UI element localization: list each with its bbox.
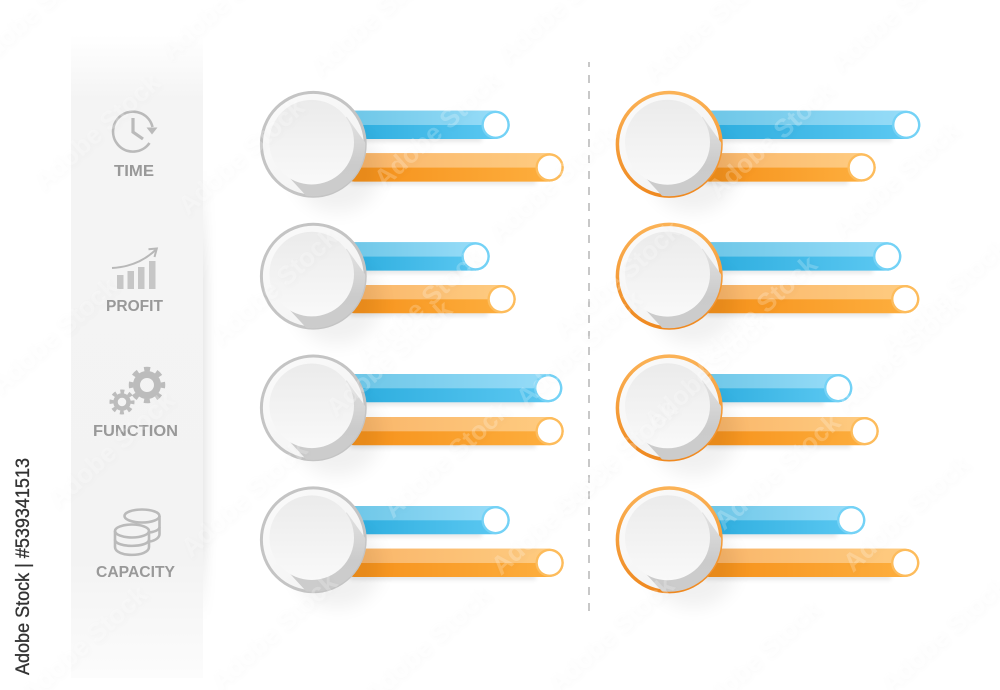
orange bar [340, 153, 564, 184]
blue bar [695, 111, 920, 142]
watermark: Adobe Stock [377, 395, 515, 524]
watermark: Adobe Stock [545, 394, 683, 523]
watermark: Adobe Stock [175, 434, 313, 563]
watermark: Adobe Stock [320, 294, 458, 423]
blue bar [695, 242, 901, 273]
watermark: Adobe Stock [638, 307, 776, 436]
blue bar [340, 506, 510, 537]
blue bar [340, 242, 490, 273]
circle [617, 356, 737, 476]
row 3 left [261, 356, 564, 476]
row 1 left [261, 92, 564, 212]
watermark: Adobe Stock [548, 215, 686, 344]
row 4 left [261, 488, 564, 608]
icon: clock [113, 112, 158, 152]
orange bar [695, 153, 876, 184]
watermark: Adobe Stock [172, 92, 310, 221]
circle [261, 92, 381, 212]
watermark: Adobe Stock [837, 449, 975, 578]
circle [617, 224, 737, 344]
circle [617, 488, 737, 608]
row 1 right [617, 92, 920, 212]
icon: profit chart [112, 248, 157, 289]
watermark: Adobe Stock [42, 385, 180, 514]
orange bar [340, 417, 564, 448]
watermark: Adobe Stock [708, 407, 846, 536]
orange bar [340, 285, 516, 316]
blue bar [340, 111, 510, 142]
stock id side text: Adobe Stock | #539341513 [12, 458, 34, 675]
orange bar [695, 417, 879, 448]
watermark: Adobe Stock [350, 242, 488, 371]
watermark: Adobe Stock [205, 222, 343, 351]
label: TIME: TIME [114, 163, 154, 180]
circle [261, 356, 381, 476]
row 2 right [617, 224, 919, 344]
blue bar [340, 374, 562, 405]
watermark: Adobe Stock [368, 65, 506, 194]
row 2 left [261, 224, 516, 344]
label: PROFIT: PROFIT [106, 298, 164, 315]
watermark: Adobe Stock [685, 249, 823, 378]
blue bar [695, 374, 852, 405]
icon: coins [115, 510, 160, 555]
label: FUNCTION: FUNCTION [93, 423, 178, 440]
watermark: Adobe Stock [28, 67, 166, 196]
watermark: Adobe Stock [510, 284, 648, 413]
watermark: Adobe Stock [830, 289, 968, 418]
row 3 right [617, 356, 879, 476]
watermark: Adobe Stock [827, 115, 965, 244]
label: CAPACITY: CAPACITY [96, 564, 176, 581]
circle [261, 488, 381, 608]
circle [261, 224, 381, 344]
orange bar [695, 549, 919, 580]
circle [617, 92, 737, 212]
orange bar [340, 549, 564, 580]
row 4 right [617, 488, 919, 608]
icon: gears [112, 369, 163, 412]
divider [588, 62, 590, 613]
panel: categories sidebar [71, 35, 207, 678]
blue bar [695, 506, 865, 537]
watermark: Adobe Stock [485, 452, 623, 581]
orange bar [695, 285, 919, 316]
watermark: Adobe Stock [483, 119, 621, 248]
watermark: Adobe Stock [702, 75, 840, 204]
